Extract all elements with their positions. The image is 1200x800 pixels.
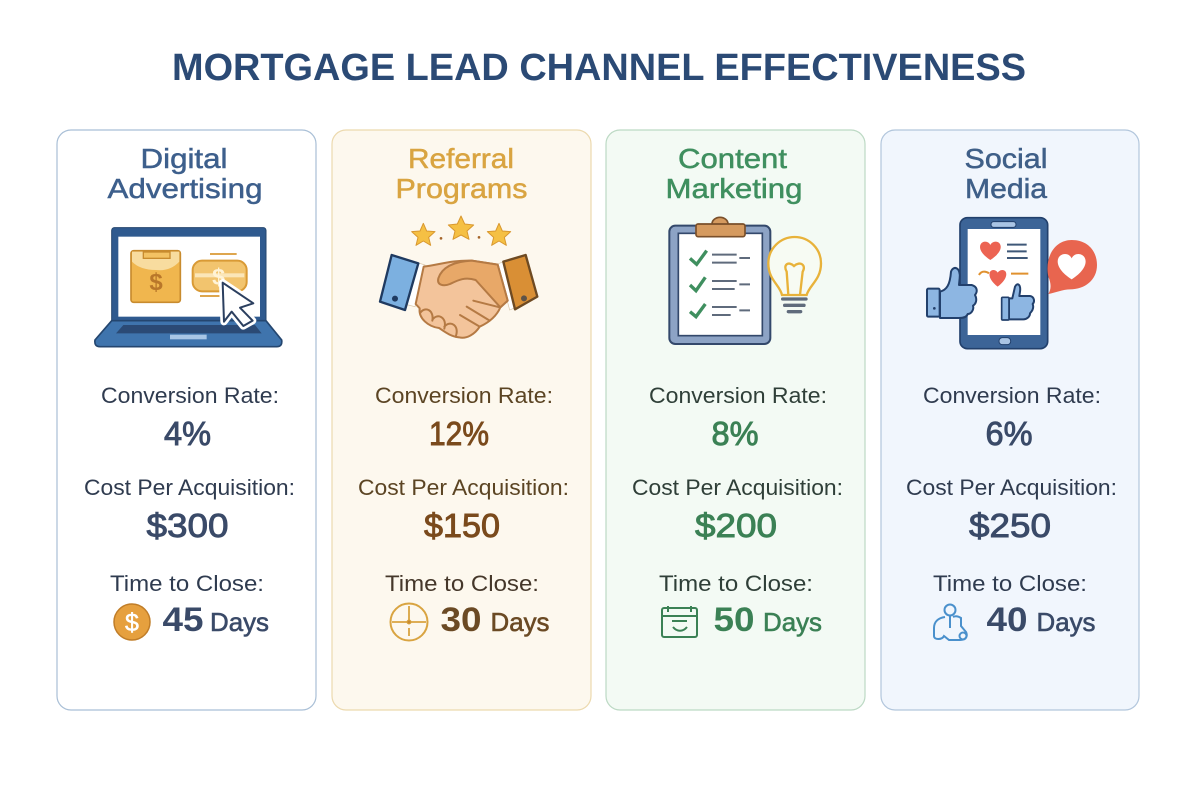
time to close [385,571,550,640]
icon: tablet with likes and hearts [927,218,1097,349]
panel: digital advertising [57,130,316,710]
panel: social media [881,130,1139,710]
conversion rate [101,383,279,452]
time to close: Days [763,607,822,637]
cost per acquisition: Cost Per Acquisition: [84,475,295,500]
icon: calendar [662,606,697,637]
conversion rate [649,383,827,452]
panel: content marketing [606,130,865,710]
icon: clock [390,604,428,640]
time to close [659,571,822,639]
cost per acquisition [906,475,1117,544]
icon: clipboard and light bulb [669,217,821,344]
time to close: Time to Close: [110,571,264,596]
time to close: 30 [440,601,482,639]
time to close: Days [1036,607,1096,637]
cost per acquisition: Cost Per Acquisition: [906,475,1117,500]
cost per acquisition [84,475,295,544]
icon: dollar coin [114,604,150,640]
time to close: Time to Close: [933,571,1087,596]
icon: laptop with ad and cursor: $ [149,269,163,296]
conversion rate [923,383,1101,452]
time to close: Time to Close: [385,571,539,596]
icon: laptop with ad and cursor: $ [212,264,225,290]
heading: referral programs [396,143,528,204]
cost per acquisition: $150 [424,507,500,544]
title: MORTGAGE LEAD CHANNEL EFFECTIVENESS [172,47,1026,89]
icon: handshake with stars [380,216,537,338]
heading: social media [964,143,1048,204]
conversion rate: Conversion Rate: [375,383,553,408]
heading: digital advertising [108,143,262,204]
time to close: 50 [714,601,754,639]
heading: digital advertising: Digital [140,143,228,174]
heading: referral programs: Programs [396,173,528,204]
cost per acquisition: Cost Per Acquisition: [358,475,569,500]
time to close: 45 [162,601,204,639]
heading: digital advertising: Advertising [108,173,262,204]
heading: referral programs: Referral [408,143,514,174]
cost per acquisition: Cost Per Acquisition: [632,475,843,500]
conversion rate: 12% [429,415,489,452]
conversion rate: Conversion Rate: [101,383,279,408]
conversion rate: 6% [986,415,1032,452]
conversion rate [375,383,553,452]
heading: content marketing: Marketing [666,173,802,204]
time to close: Days [490,607,550,637]
heading: social media: Media [965,173,1047,204]
conversion rate: Conversion Rate: [649,383,827,408]
icon: blue hand outline [934,604,967,640]
heading: social media: Social [964,143,1048,174]
cost per acquisition: $200 [695,507,777,544]
time to close [933,571,1096,640]
conversion rate: 4% [164,415,211,452]
panel: referral programs [332,130,591,710]
time to close: Time to Close: [659,571,813,596]
cost per acquisition [632,475,843,544]
cost per acquisition: $300 [146,507,228,544]
cost per acquisition: $250 [969,507,1051,544]
conversion rate: Conversion Rate: [923,383,1101,408]
cost per acquisition [358,475,569,544]
time to close: Days [210,607,269,637]
time to close [110,571,269,640]
heading: content marketing: Content [678,143,787,174]
conversion rate: 8% [712,415,758,452]
icon: dollar coin: $ [125,609,139,637]
time to close: 40 [986,601,1028,639]
heading: content marketing [666,143,802,204]
icon: laptop with ad and cursor [95,228,282,347]
